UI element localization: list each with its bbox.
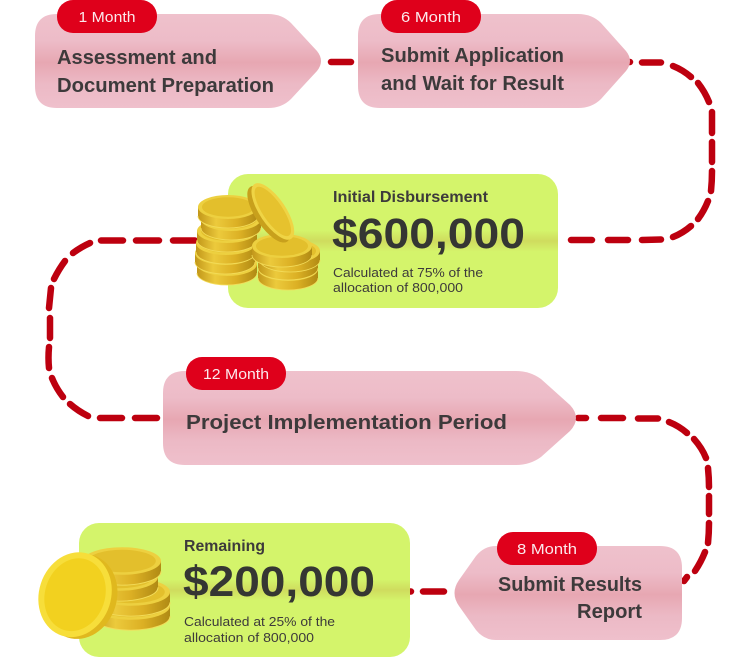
arrow box	[35, 14, 321, 108]
step title: Submit Application	[381, 44, 564, 67]
note: allocation of 800,000	[333, 280, 463, 295]
duration badge: 6 Month	[401, 9, 461, 26]
panel: step 4 results report	[454, 532, 682, 640]
duration badge: 1 Month	[78, 9, 136, 26]
connector: step 4 to remaining	[410, 588, 444, 595]
panel: step 3 implementation	[163, 357, 576, 465]
note	[184, 614, 335, 645]
duration badge: 8 Month	[517, 541, 577, 558]
icon: coin pile	[28, 543, 170, 649]
note: Calculated at 75% of the	[333, 265, 483, 280]
note: Calculated at 25% of the	[184, 614, 335, 629]
step title: Document Preparation	[57, 74, 274, 97]
step title	[498, 573, 642, 623]
label: Initial Disbursement	[333, 189, 488, 206]
panel: step 2 application	[358, 0, 630, 108]
step title	[57, 46, 274, 97]
step title: Submit Results	[498, 573, 642, 596]
step title: and Wait for Result	[381, 72, 564, 95]
duration badge: 12 Month	[203, 366, 269, 383]
note	[333, 265, 483, 295]
step title	[381, 44, 564, 95]
green card	[228, 174, 558, 308]
duration badge	[497, 532, 597, 565]
big front coin	[28, 543, 128, 649]
connector: step 3 to step 4	[578, 418, 709, 581]
arrow box	[358, 14, 630, 108]
panel: initial disbursement	[195, 174, 558, 308]
amount: $600,000	[332, 210, 525, 258]
step title: Assessment and	[57, 46, 217, 69]
amount: $200,000	[183, 558, 375, 606]
green card	[79, 523, 410, 657]
duration badge	[381, 0, 481, 33]
panel: remaining	[28, 523, 410, 657]
step title: Project Implementation Period	[186, 411, 507, 434]
note: allocation of 800,000	[184, 630, 314, 645]
icon: coin stacks	[195, 177, 320, 290]
panel: step 1 assessment	[35, 0, 321, 108]
arrow box	[163, 371, 576, 465]
arrow box	[454, 546, 682, 640]
label: Remaining	[184, 538, 265, 555]
duration badge	[186, 357, 286, 390]
connector: step 2 to initial disbursement	[571, 62, 712, 240]
connector: initial disbursement to step 3	[48, 240, 195, 418]
tilted coin	[239, 177, 302, 249]
duration badge	[57, 0, 157, 33]
step title: Report	[577, 600, 642, 623]
connector: step 1 to step 2	[331, 59, 351, 65]
